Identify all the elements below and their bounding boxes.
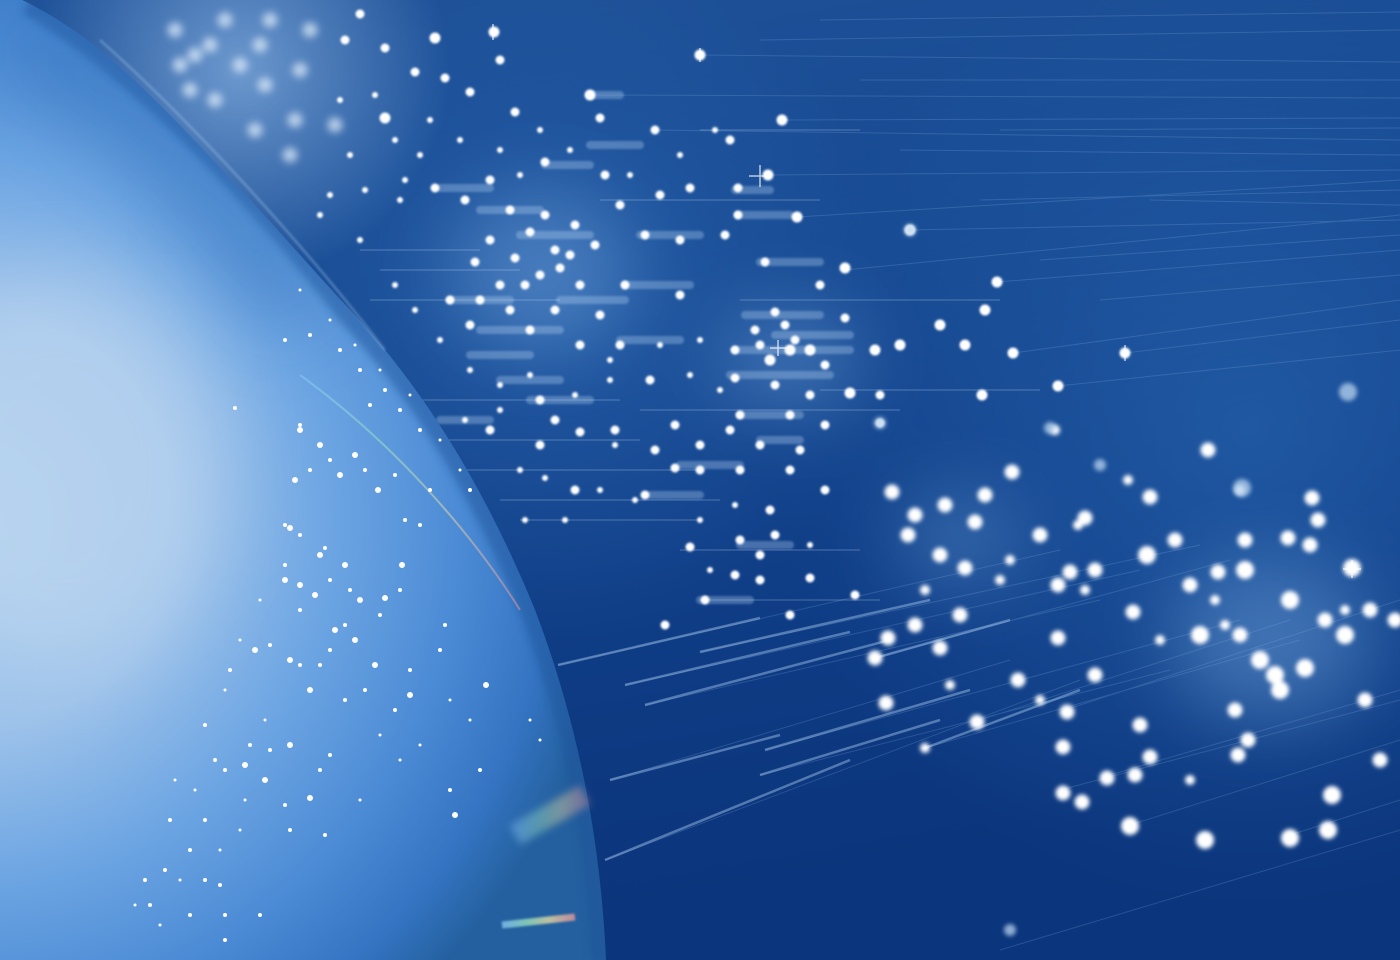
light points: right cluster, large and soft <box>875 430 1395 840</box>
glass sphere <box>0 0 606 960</box>
sphere soft highlight <box>0 270 230 670</box>
light points: reflections inside the sphere <box>135 290 540 940</box>
rim highlight <box>100 40 385 350</box>
bright sparkle glints <box>493 24 1361 578</box>
rainbow flare lower <box>502 917 575 925</box>
sphere dark rim <box>23 2 574 758</box>
fibre strands: brighter lower bundles <box>558 600 1080 860</box>
sphere upper shading <box>0 40 300 310</box>
light points: upper cluster, sharp <box>320 14 1125 625</box>
light points: dim blurred far points <box>880 230 1348 930</box>
fibre strands: short glass cylinders <box>440 95 850 600</box>
fibre strands: fine upper-cluster lines <box>360 130 1040 600</box>
rainbow flare upper <box>515 795 585 835</box>
blurred far light points at top <box>175 20 335 155</box>
rainbow reflection arc <box>300 375 520 610</box>
cluster glows behind the light points <box>450 190 1370 720</box>
fibre strands: long faint lines <box>558 12 1400 950</box>
